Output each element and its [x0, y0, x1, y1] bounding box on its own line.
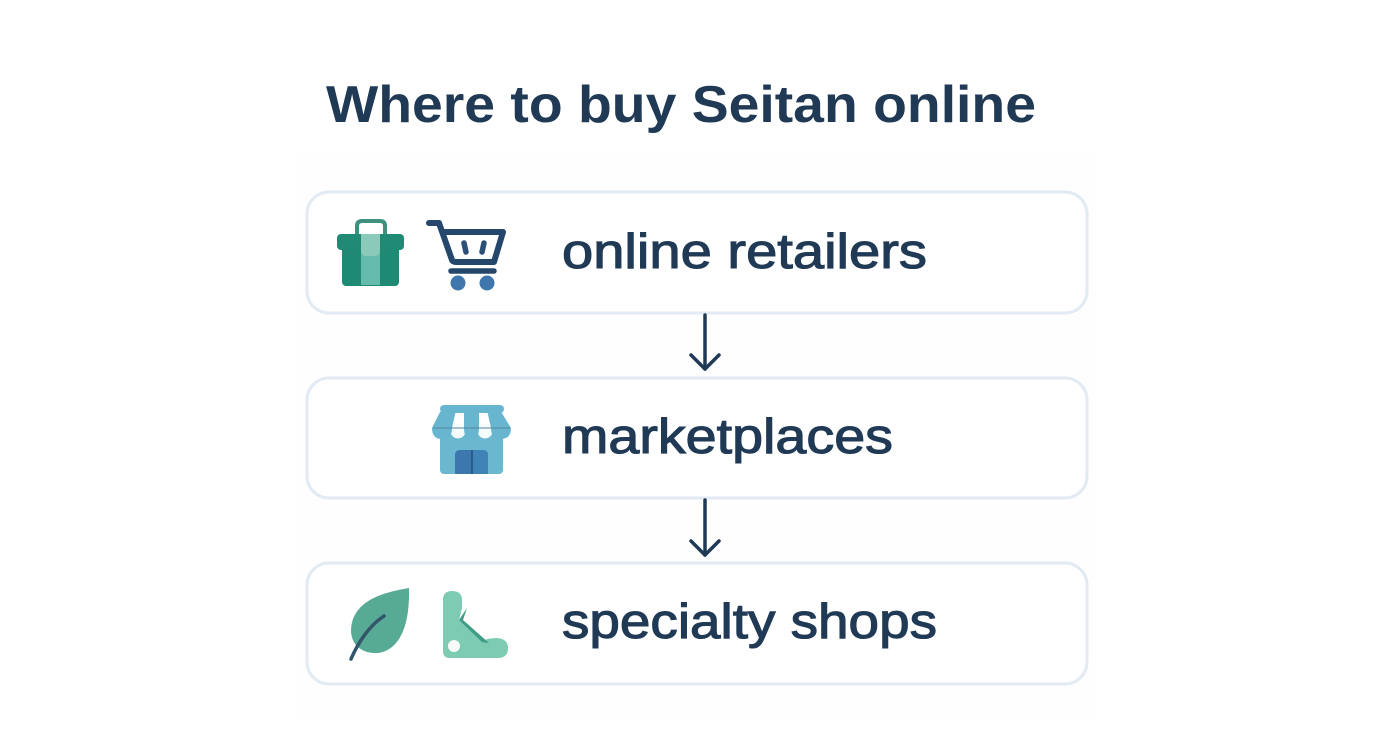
label: marketplaces: marketplaces [562, 410, 893, 464]
icon: storefront [432, 405, 511, 474]
icon: leaf [351, 588, 409, 659]
icon: specialty shape [443, 591, 508, 658]
icon: shopping cart [429, 223, 503, 290]
panel: marketplaces [307, 378, 1087, 498]
arrow: marketplaces to specialty shops [691, 500, 719, 555]
panel: online retailers [307, 192, 1087, 313]
icon: toolbox bag [337, 221, 404, 286]
label: specialty shops: specialty shops [562, 595, 937, 649]
panel: specialty shops [307, 563, 1087, 684]
title: Where to buy Seitan online [326, 76, 1036, 134]
label: online retailers: online retailers [562, 225, 927, 279]
arrow: online retailers to marketplaces [691, 315, 719, 369]
